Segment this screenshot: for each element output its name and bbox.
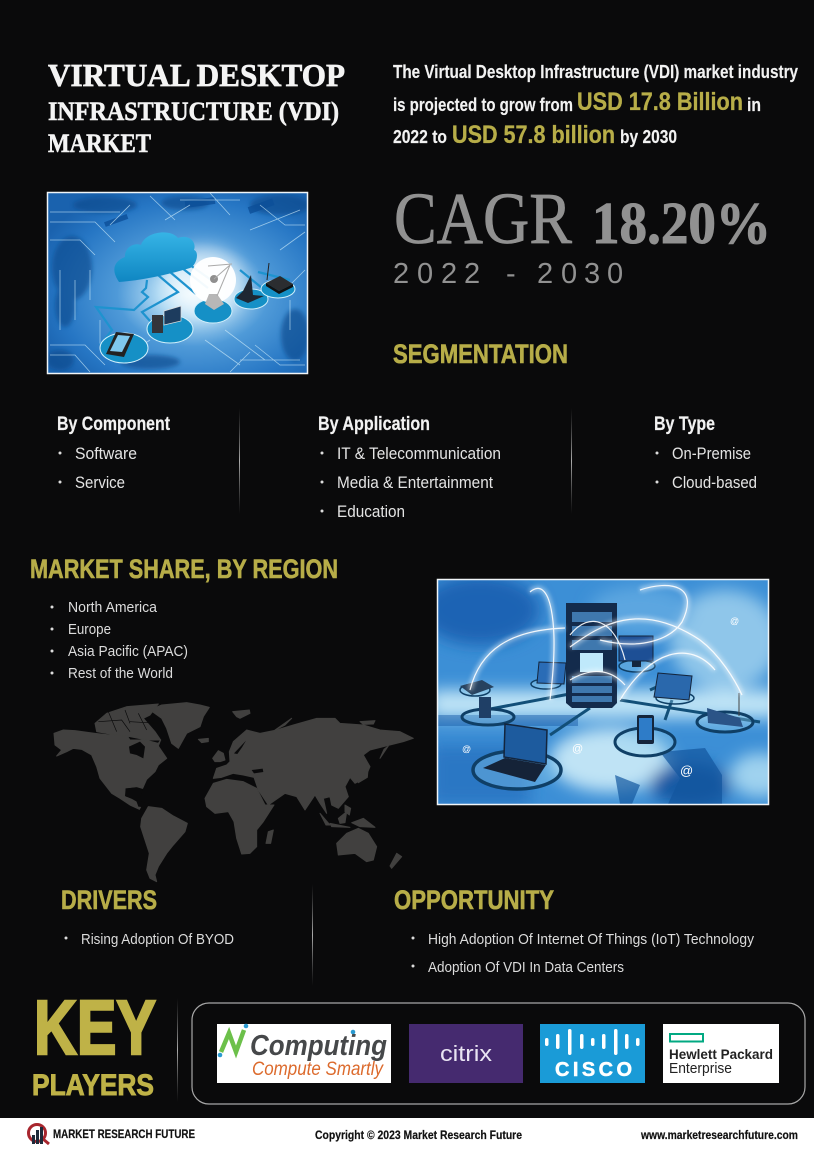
heading: key players: KEY [34, 985, 156, 1071]
server rack [566, 603, 617, 708]
laptop device [236, 275, 264, 303]
logo: Hewlett Packard Enterprise: Hewlett Packard [669, 1046, 773, 1062]
satellite dish [190, 257, 236, 303]
intro text with market values: USD 57.8 billion [452, 121, 615, 149]
footer: Copyright © 2023 Market Research Future [315, 1128, 522, 1142]
tablet right [654, 673, 692, 700]
logo: NComputing: Compute Smartly [252, 1059, 384, 1080]
heading: key players [32, 985, 156, 1102]
router device [266, 276, 293, 291]
opportunity list [412, 931, 754, 976]
CAGR figure [393, 178, 771, 290]
segment: by component: Software [75, 444, 137, 463]
heading: drivers: DRIVERS [61, 885, 157, 915]
segment: by application [318, 414, 501, 521]
monitor [619, 636, 653, 661]
phone left [479, 697, 491, 718]
cloud [114, 232, 197, 282]
logo: Citrix: citrix [440, 1041, 492, 1066]
key players panel [192, 1003, 805, 1104]
CAGR figure: 18.20% [592, 190, 771, 256]
circuit traces [50, 193, 305, 372]
intro text with market values [393, 62, 798, 149]
logo: NComputing [217, 1024, 391, 1083]
segment: by component: By Component [57, 414, 171, 435]
segment: by application: IT & Telecommunication [337, 444, 501, 463]
heading: opportunity: OPPORTUNITY [394, 885, 554, 915]
segment: by type [654, 414, 757, 492]
desktop device [152, 315, 163, 333]
intro text with market values: 2022 to [393, 127, 447, 147]
opportunity list: Adoption Of VDI In Data Centers [428, 959, 624, 976]
logo: NComputing: Computing [250, 1030, 387, 1062]
segment: by type: Cloud-based [672, 473, 757, 492]
region list: Rest of the World [68, 665, 173, 682]
at symbols: @ [680, 763, 693, 778]
region list [50, 599, 188, 682]
dark circuit texture [46, 195, 310, 370]
segment: by application: Education [337, 502, 405, 521]
phone [637, 715, 654, 744]
title: MARKET [48, 129, 151, 158]
at symbols: @ [462, 744, 471, 754]
footer [0, 1118, 814, 1150]
logo: Cisco [540, 1024, 645, 1083]
CAGR figure: 2022 - 2030 [393, 258, 623, 290]
intro text with market values: USD 17.8 Billion [577, 88, 743, 116]
soft colour areas [438, 580, 768, 804]
logo: Citrix [409, 1024, 523, 1083]
world map backdrop [660, 748, 722, 804]
heading: key players: PLAYERS [32, 1069, 154, 1102]
intro text with market values: by 2030 [620, 127, 677, 147]
connection cables [491, 686, 760, 736]
signal arcs [470, 585, 742, 700]
router left [460, 680, 494, 695]
heading: market share by region: MARKET SHARE, BY REGION [30, 554, 338, 584]
glow [165, 246, 245, 318]
drivers list: Rising Adoption Of BYOD [81, 931, 234, 948]
opportunity list: High Adoption Of Internet Of Things (IoT) Technology [428, 931, 754, 948]
router right [707, 708, 743, 727]
photo: cloud network illustration [46, 193, 310, 373]
large laptop [504, 724, 547, 764]
world map [54, 703, 413, 882]
at symbols [462, 616, 739, 778]
cables [96, 265, 290, 345]
intro text with market values: is projected to grow from [393, 95, 573, 115]
segment: by application: By Application [318, 414, 430, 435]
photo: server network illustration [438, 580, 768, 804]
photo frame 2 [438, 580, 768, 804]
footer: MARKET RESEARCH FUTURE [53, 1127, 195, 1141]
intro text with market values: in [747, 95, 761, 115]
device platforms [100, 280, 295, 363]
title: INFRASTRUCTURE (VDI) [48, 97, 339, 126]
title [48, 57, 345, 158]
title: VIRTUAL DESKTOP [48, 57, 345, 93]
icon: company logo [28, 1124, 49, 1144]
segment: by component: Service [75, 473, 125, 492]
region list: North America [68, 599, 158, 616]
tablet device [106, 332, 134, 357]
laptop small [537, 662, 566, 684]
segment: by application: Media & Entertainment [337, 473, 493, 492]
segment: by component [57, 414, 171, 492]
at symbols: @ [572, 743, 583, 755]
region list: Europe [68, 621, 111, 638]
logo: Hewlett Packard Enterprise: Enterprise [669, 1060, 732, 1077]
CAGR figure: CAGR [394, 178, 572, 259]
region list: Asia Pacific (APAC) [68, 643, 188, 660]
heading: segmentation: SEGMENTATION [393, 339, 568, 369]
segment: by type: On-Premise [672, 444, 751, 463]
segment: by type: By Type [654, 414, 715, 435]
photo frame 1 [48, 192, 308, 374]
logo: Hewlett Packard Enterprise [663, 1024, 779, 1083]
logo: Cisco: CISCO [555, 1059, 632, 1081]
at symbols: @ [730, 616, 739, 626]
device rings [460, 660, 753, 789]
